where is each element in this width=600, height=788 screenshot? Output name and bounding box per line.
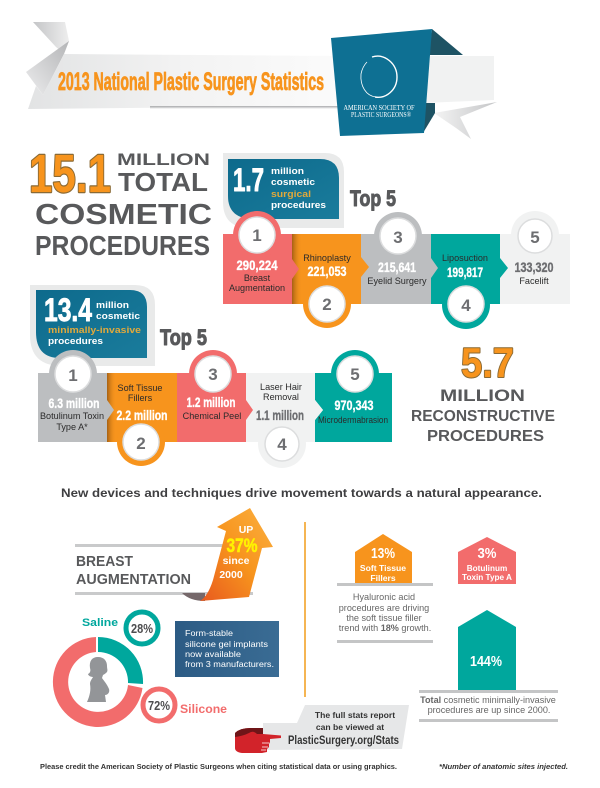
gray rules	[75, 544, 225, 547]
stat: soft tissue fillers: 13%	[371, 545, 395, 562]
headline: 15.1 million total cosmetic procedures: 15.1	[29, 144, 111, 204]
step 4: liposuction: 199,817	[447, 264, 483, 280]
saline label: Saline	[82, 617, 118, 629]
step 5: facelift: 5	[530, 228, 540, 247]
callout: 13.4 million minimally-invasive	[30, 285, 155, 366]
stat: total minimally-invasive: 144%	[470, 653, 502, 670]
headline: 15.1 million total cosmetic procedures: COSMETIC	[35, 199, 212, 231]
breast augmentation banner: 2000	[219, 569, 243, 581]
silicone percent	[143, 689, 175, 721]
step 4: liposuction	[431, 234, 508, 329]
right ribbon tail	[434, 102, 497, 139]
step 3: eyelid surgery: Eyelid Surgery	[367, 276, 427, 286]
step 4: laser hair removal: Removal	[263, 392, 299, 402]
headline: 5.7 million reconstructive procedures: RECONSTRUCTIVE	[411, 408, 555, 425]
headline: 5.7 million reconstructive procedures: PROCEDURES	[427, 428, 544, 445]
step 1: breast augmentation: Augmentation	[229, 283, 285, 293]
step 1: breast augmentation: Breast	[244, 273, 271, 283]
logo panel	[331, 29, 432, 136]
silicone percent: 72%	[148, 698, 170, 713]
step 3: chemical peel: 3	[208, 365, 218, 384]
icon: red pointing hand	[235, 728, 281, 753]
callout: 1.7 million surgical: cosmetic	[271, 177, 315, 187]
step 1: botulinum toxin: 6.3 million	[48, 395, 100, 411]
logo text: AMERICAN SOCIETY OF	[344, 103, 414, 112]
headline: 15.1 million total cosmetic procedures	[29, 144, 212, 261]
step 5: microdermabrasion: Microdermabrasion	[318, 415, 388, 425]
finger gaps	[261, 743, 269, 750]
header banner	[26, 22, 497, 139]
footer credit: Please credit the American Society of Plastic Surgeons when citing statistical data or using graphics.	[40, 762, 397, 771]
surgical top 5 row	[223, 211, 570, 329]
stat: soft tissue fillers: Soft Tissue	[360, 563, 406, 573]
step 1: breast augmentation: 1	[252, 226, 262, 245]
step 4: laser hair removal: Laser Hair	[260, 382, 302, 392]
step 2: rhinoplasty: 2	[322, 295, 332, 314]
stat: botulinum toxin type a: 3%	[478, 545, 496, 562]
breast augmentation banner	[75, 508, 273, 601]
logo text: PLASTIC SURGEONS®	[351, 110, 411, 119]
saline ring	[98, 637, 143, 684]
saline percent	[126, 612, 158, 644]
minimally-invasive top 5 row	[38, 350, 392, 468]
callout: 13.4 million minimally-invasive: 13.4	[44, 292, 92, 328]
section heading: New devices and techniques drive movement towards a natural appearance.	[61, 486, 542, 500]
callout: 1.7 million surgical: 1.7	[233, 162, 264, 198]
stat: soft tissue fillers: Fillers	[370, 573, 396, 583]
logo ring	[361, 56, 397, 97]
step 1: botulinum toxin: 1	[68, 366, 78, 385]
callout: 13.4 million minimally-invasive: cosmetic	[96, 311, 140, 321]
step 3: chemical peel	[177, 350, 253, 442]
callout: form-stable implants: silicone gel implants	[185, 640, 268, 649]
up arrow	[200, 508, 273, 601]
full report panel: The full stats report	[315, 710, 395, 720]
full report panel: can be viewed at	[316, 722, 384, 732]
description: Hyaluronic acid	[353, 592, 415, 602]
step 2: soft tissue fillers	[107, 373, 177, 466]
step 5: microdermabrasion: 970,343	[334, 397, 374, 413]
headline: 15.1 million total cosmetic procedures: TOTAL	[118, 167, 208, 197]
callout: 13.4 million minimally-invasive: minimally-invasive	[48, 325, 141, 335]
description	[339, 592, 431, 633]
step 2: rhinoplasty: Rhinoplasty	[303, 253, 351, 263]
ribbon body	[28, 54, 340, 109]
stat: soft tissue fillers	[337, 534, 433, 643]
step 2: soft tissue fillers: Fillers	[128, 393, 153, 403]
breast augmentation banner: AUGMENTATION	[76, 572, 191, 588]
stat: botulinum toxin type a: Toxin Type A	[462, 573, 512, 582]
step 4: laser hair removal: 1.1 million	[256, 407, 304, 423]
callout: 1.7 million surgical: procedures	[271, 200, 326, 210]
arrow text: UP	[239, 524, 253, 536]
description: Total cosmetic minimally-invasive	[420, 695, 556, 705]
description: procedures are driving	[339, 603, 429, 613]
step 5: microdermabrasion	[315, 350, 392, 442]
step 2: soft tissue fillers: 2.2 million	[116, 407, 168, 423]
full report panel	[263, 705, 409, 750]
step 2: rhinoplasty	[292, 234, 369, 328]
donut chart: saline vs silicone	[53, 612, 227, 727]
step 3: eyelid surgery	[361, 212, 438, 304]
callout: 1.7 million surgical: surgical	[271, 189, 311, 199]
logo dark folds	[423, 29, 463, 133]
step 4: liposuction: 4	[461, 296, 471, 315]
title: 2013 National Plastic Surgery Statistics	[58, 68, 324, 96]
saline percent: 28%	[131, 621, 153, 636]
callout: form-stable implants: Form-stable	[185, 629, 233, 638]
stat: botulinum toxin type a	[458, 537, 516, 584]
stat: botulinum toxin type a: Botulinum	[467, 564, 507, 573]
callout: 1.7 million surgical: million	[271, 166, 304, 176]
description: procedures are up since 2000.	[428, 705, 550, 715]
step 1: breast augmentation: 290,224	[236, 257, 278, 273]
left ribbon top fold	[33, 22, 69, 54]
step 2: soft tissue fillers: 2	[136, 434, 146, 453]
step 4: liposuction: Liposuction	[442, 253, 488, 263]
right ribbon	[424, 56, 494, 103]
step 5: facelift: Facelift	[519, 276, 549, 286]
step 5: facelift: 133,320	[514, 259, 554, 275]
step 2: soft tissue fillers: Soft Tissue	[118, 383, 162, 393]
left ribbon lower fold	[26, 41, 69, 95]
stat: total minimally-invasive	[419, 610, 558, 722]
vertical divider	[304, 522, 306, 697]
headline: 5.7 million reconstructive procedures: MILLION	[440, 387, 525, 405]
callout: form-stable implants: now available	[185, 650, 241, 659]
cuff shadow	[235, 728, 263, 737]
step 5: microdermabrasion: 5	[350, 365, 360, 384]
headline: 15.1 million total cosmetic procedures: MILLION	[117, 150, 210, 169]
step 1: botulinum toxin	[38, 350, 114, 442]
breast augmentation banner: since	[223, 555, 250, 567]
description: the soft tissue filler	[346, 613, 422, 623]
step 1: botulinum toxin: Botulinum Toxin	[40, 411, 104, 421]
step 3: eyelid surgery: 215,641	[378, 259, 416, 275]
callout: 1.7 million surgical	[223, 153, 344, 228]
step 3: chemical peel: Chemical Peel	[183, 411, 241, 421]
step 4: laser hair removal	[246, 373, 323, 468]
headline: 5.7 million reconstructive procedures: 5.7	[461, 339, 514, 386]
step 3: eyelid surgery: 3	[393, 228, 403, 247]
icon: female silhouette	[87, 657, 109, 702]
ribbon fold	[182, 593, 205, 601]
step 2: rhinoplasty: 221,053	[308, 263, 347, 279]
description	[420, 695, 556, 715]
description: trend with 18% growth.	[339, 623, 431, 633]
sleeve and fist	[235, 728, 281, 753]
callout: 13.4 million minimally-invasive: procedures	[48, 336, 103, 346]
headline: 5.7 million reconstructive procedures	[411, 339, 555, 445]
step 5: facelift	[500, 211, 570, 304]
callout: form-stable implants: from 3 manufacturers.	[185, 660, 274, 669]
silicone label: Silicone	[180, 702, 227, 716]
step 3: chemical peel: 1.2 million	[186, 394, 236, 410]
label: BREAST	[76, 554, 133, 570]
heading: top 5 minimally-invasive: Top 5	[160, 325, 207, 350]
silicone ring	[53, 637, 143, 727]
callout: 13.4 million minimally-invasive: million	[96, 300, 129, 310]
breast augmentation banner: 37%	[226, 536, 258, 557]
logo text	[344, 103, 414, 119]
full report panel: PlasticSurgery.org/Stats	[288, 735, 399, 747]
step 4: laser hair removal: 4	[277, 435, 287, 454]
callout: form-stable implants	[175, 621, 279, 677]
footnote: *Number of anatomic sites injected.	[439, 762, 568, 771]
headline: 15.1 million total cosmetic procedures: PROCEDURES	[35, 230, 210, 261]
heading: top 5 surgical: Top 5	[350, 186, 396, 211]
step 1: breast augmentation	[223, 211, 299, 304]
step 1: botulinum toxin: Type A*	[56, 422, 88, 432]
